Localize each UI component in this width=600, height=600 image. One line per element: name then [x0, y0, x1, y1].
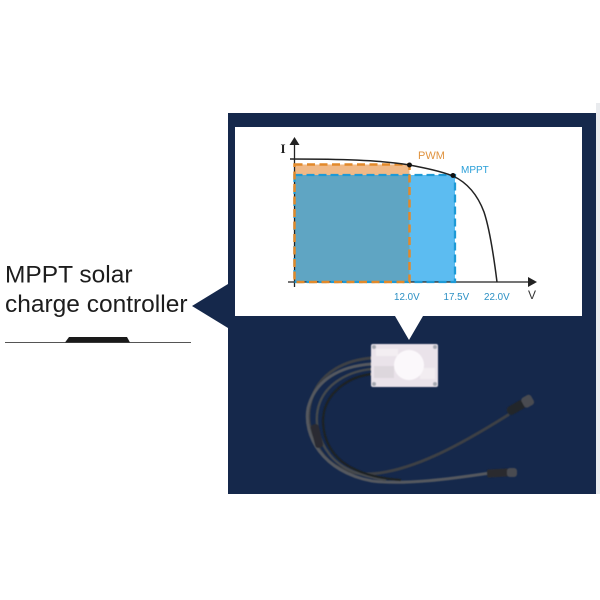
overlap area — [294, 175, 410, 282]
axis label I: I — [280, 141, 286, 156]
label 22.0V: 22.0V — [484, 292, 510, 303]
heading: MPPT solar charge controller: charge controller — [5, 291, 187, 318]
label MPPT: MPPT — [461, 165, 489, 176]
chart: I-V curve comparing PWM and MPPT — [280, 137, 537, 303]
panel: navy background — [192, 113, 596, 494]
MPPT extra area — [410, 175, 455, 282]
inline cable junction — [310, 423, 324, 449]
MPPT dashed outline — [294, 175, 455, 282]
controller enclosure — [371, 344, 438, 387]
y axis — [290, 137, 300, 287]
product photo: controller with cables — [307, 344, 535, 482]
x axis — [288, 277, 537, 287]
connector lower — [487, 468, 517, 478]
label 17.5V: 17.5V — [444, 292, 470, 303]
cables — [307, 358, 508, 482]
axis label V: V — [528, 288, 536, 302]
IV curve — [290, 159, 497, 282]
label 12.0V: 12.0V — [394, 292, 420, 303]
PWM power area — [294, 164, 410, 175]
label PWM: PWM — [418, 150, 445, 162]
connector upper — [505, 394, 535, 416]
heading: MPPT solar charge controller: MPPT solar — [5, 262, 133, 288]
PWM dashed outline — [294, 164, 410, 282]
MPPT operating point — [450, 173, 456, 178]
PWM operating point — [407, 162, 412, 168]
panel: white chart card — [235, 127, 582, 340]
icon: controller side profile on line — [5, 337, 191, 343]
